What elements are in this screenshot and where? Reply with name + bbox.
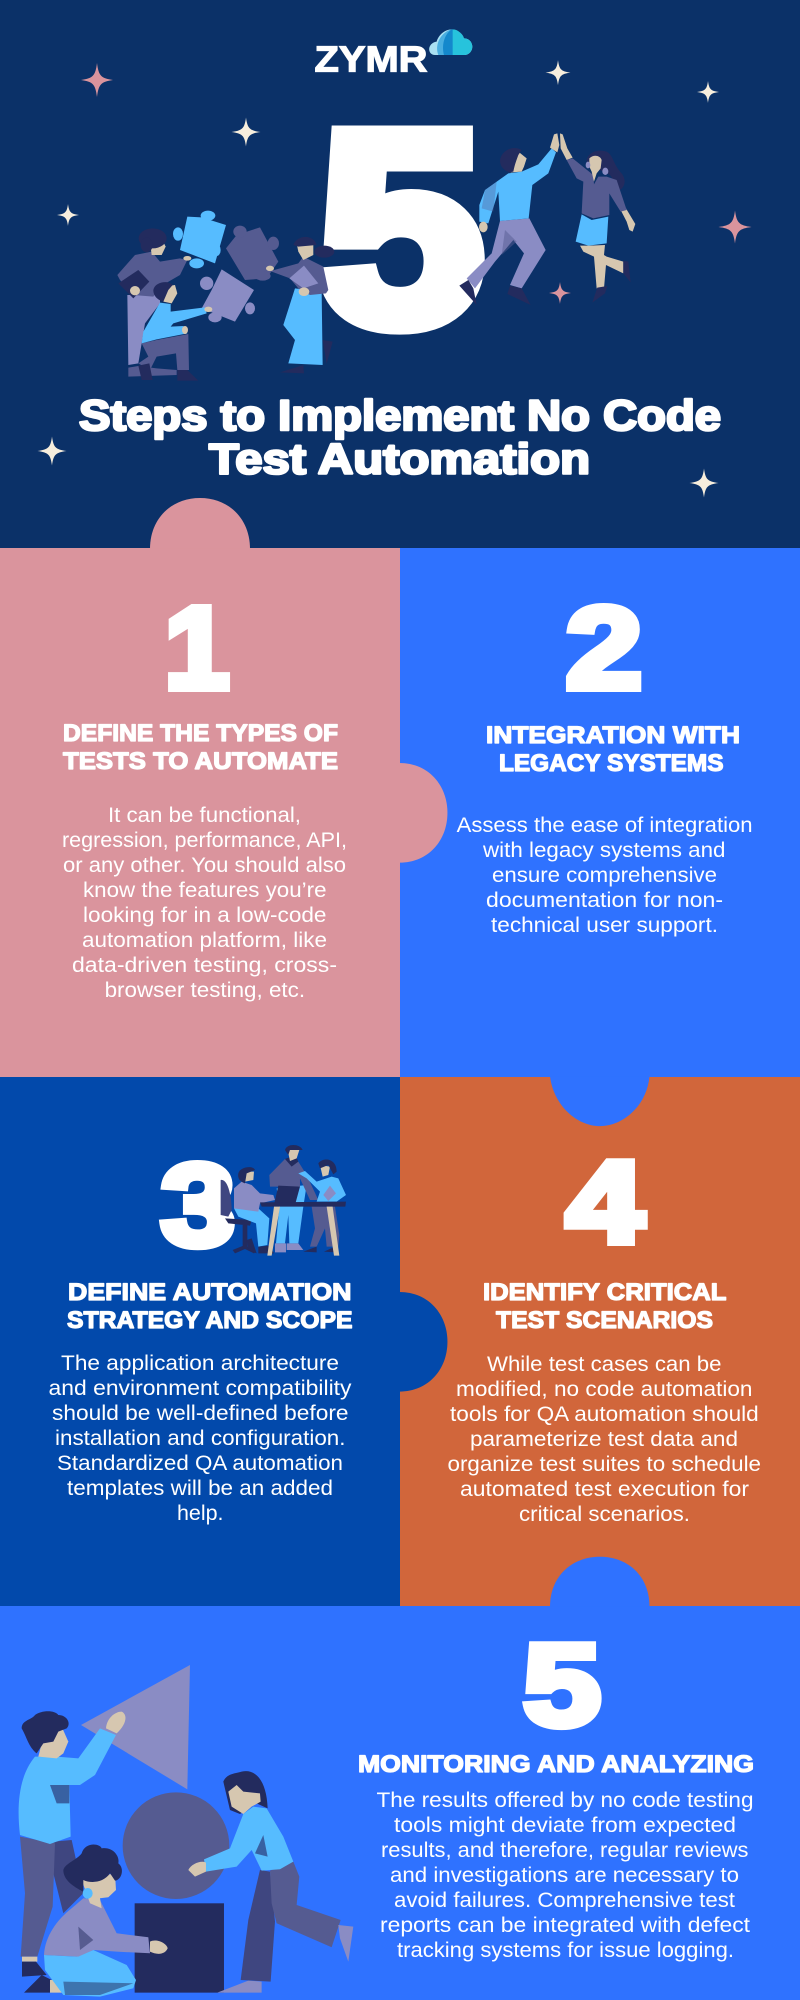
body text 3: and environment compatibility xyxy=(48,1377,352,1400)
puzzle piece: light blue xyxy=(173,211,226,268)
body text 5: results, and therefore, regular reviews xyxy=(381,1839,748,1862)
body text 5: and investigations are necessary to xyxy=(390,1864,739,1887)
heading 2 xyxy=(486,722,740,777)
figure: kneeling person xyxy=(138,282,212,381)
heading 2: INTEGRATION WITH xyxy=(486,722,740,749)
body text 5 xyxy=(376,1789,754,1962)
body text 1: regression, performance, API, xyxy=(62,829,347,852)
body text 3: help. xyxy=(177,1502,224,1525)
body text 1: looking for in a low-code xyxy=(83,904,326,927)
body text 2: with legacy systems and xyxy=(482,839,726,862)
heading 3 xyxy=(67,1279,352,1334)
body text 3: Standardized QA automation xyxy=(57,1452,343,1475)
heading 1: DEFINE THE TYPES OF xyxy=(63,720,338,747)
body text 3: should be well-defined before xyxy=(52,1402,348,1425)
shape: circle xyxy=(123,1792,229,1899)
body text 2 xyxy=(457,814,753,937)
figure: woman high-fiving xyxy=(560,133,635,303)
decorative stars xyxy=(38,60,752,497)
body text 1: automation platform, like xyxy=(82,929,327,952)
shape: triangle xyxy=(81,1665,190,1789)
body text 5: avoid failures. Comprehensive test xyxy=(394,1889,735,1912)
heading 4: IDENTIFY CRITICAL xyxy=(483,1279,726,1306)
figure: standing person xyxy=(117,228,191,377)
body text 2: Assess the ease of integration xyxy=(457,814,753,837)
body text 4: critical scenarios. xyxy=(519,1503,690,1526)
body text 2: technical user support. xyxy=(491,914,718,937)
illustration: team assembling puzzle xyxy=(117,211,334,381)
body text 3: The application architecture xyxy=(61,1352,339,1375)
puzzle piece: slate xyxy=(226,226,279,281)
figure: person reaching triangle xyxy=(19,1711,125,1977)
body text 5: tools might deviate from expected xyxy=(394,1814,736,1837)
heading 4: TEST SCENARIOS xyxy=(496,1307,713,1334)
figure: person crouching at square xyxy=(24,1845,168,1997)
illustration: people moving shapes xyxy=(19,1665,353,1997)
icon: cloud xyxy=(429,29,472,55)
body text 2: documentation for non- xyxy=(486,889,723,912)
panel 2: integration with legacy systems xyxy=(400,548,800,1077)
body text 4: organize test suites to schedule xyxy=(448,1453,761,1476)
puzzle tab: panel 3 right xyxy=(399,1292,447,1392)
panel 1: define types of tests xyxy=(0,548,400,1077)
heading 3: STRATEGY AND SCOPE xyxy=(67,1307,352,1334)
body text 1: or any other. You should also xyxy=(63,854,346,877)
body text 4: While test cases can be xyxy=(487,1353,722,1376)
body text 2: ensure comprehensive xyxy=(492,864,717,887)
body text 4: parameterize test data and xyxy=(470,1428,738,1451)
body text 1: know the features you’re xyxy=(83,879,326,902)
puzzle piece: periwinkle xyxy=(200,269,255,322)
logo: ZYMR: ZYMR xyxy=(314,38,428,80)
title xyxy=(79,392,721,484)
body text 5: reports can be integrated with defect xyxy=(380,1914,750,1937)
figure: person pushing circle xyxy=(188,1771,353,1993)
puzzle tab: panel 1 right xyxy=(399,763,447,863)
figure: woman with folder xyxy=(266,237,334,373)
body text 4: automated test execution for xyxy=(460,1478,749,1501)
heading 2: LEGACY SYSTEMS xyxy=(499,750,724,777)
heading 3: DEFINE AUTOMATION xyxy=(68,1279,352,1306)
body text 3: templates will be an added xyxy=(67,1477,333,1500)
title: Steps to Implement No Code xyxy=(79,392,721,440)
number 4: 4 xyxy=(566,1138,644,1267)
puzzle tab: panel 2 bottom xyxy=(550,1076,649,1126)
big number 5: 5 xyxy=(319,76,483,382)
figure: man high-fiving xyxy=(459,133,559,305)
panel 3: automation strategy and scope xyxy=(0,1077,400,1606)
logo: ZYMR xyxy=(314,29,472,80)
body text 3: installation and configuration. xyxy=(55,1427,346,1450)
heading 5: MONITORING AND ANALYZING xyxy=(358,1751,754,1778)
puzzle tab: panel 5 top xyxy=(550,1557,649,1607)
body text 4: tools for QA automation should xyxy=(450,1403,759,1426)
heading 1 xyxy=(63,720,338,775)
header panel xyxy=(0,0,800,548)
body text 1: It can be functional, xyxy=(108,804,301,827)
body text 4: modified, no code automation xyxy=(456,1378,752,1401)
number 3: 3 xyxy=(161,1141,235,1270)
panel 4: identify critical test scenarios xyxy=(400,1077,800,1606)
shape: square xyxy=(135,1903,224,1993)
number 2: 2 xyxy=(566,583,642,713)
panel 5: monitoring and analyzing xyxy=(0,1606,800,2000)
illustration: team at desk xyxy=(221,1145,346,1256)
number 1: 1 xyxy=(165,583,229,713)
puzzle tab: panel 1 top xyxy=(150,498,250,549)
body text 3 xyxy=(48,1352,352,1525)
body text 1: data-driven testing, cross- xyxy=(72,954,337,977)
heading 4 xyxy=(483,1279,726,1334)
body text 1: browser testing, etc. xyxy=(105,979,305,1002)
body text 5: tracking systems for issue logging. xyxy=(397,1939,734,1962)
body text 5: The results offered by no code testing xyxy=(376,1789,754,1812)
number 5: 5 xyxy=(523,1621,601,1750)
body text 4 xyxy=(448,1353,761,1526)
heading 1: TESTS TO AUTOMATE xyxy=(63,748,338,775)
body text 1 xyxy=(62,804,347,1002)
title: Test Automation xyxy=(209,436,590,484)
illustration: high-five xyxy=(459,133,635,305)
